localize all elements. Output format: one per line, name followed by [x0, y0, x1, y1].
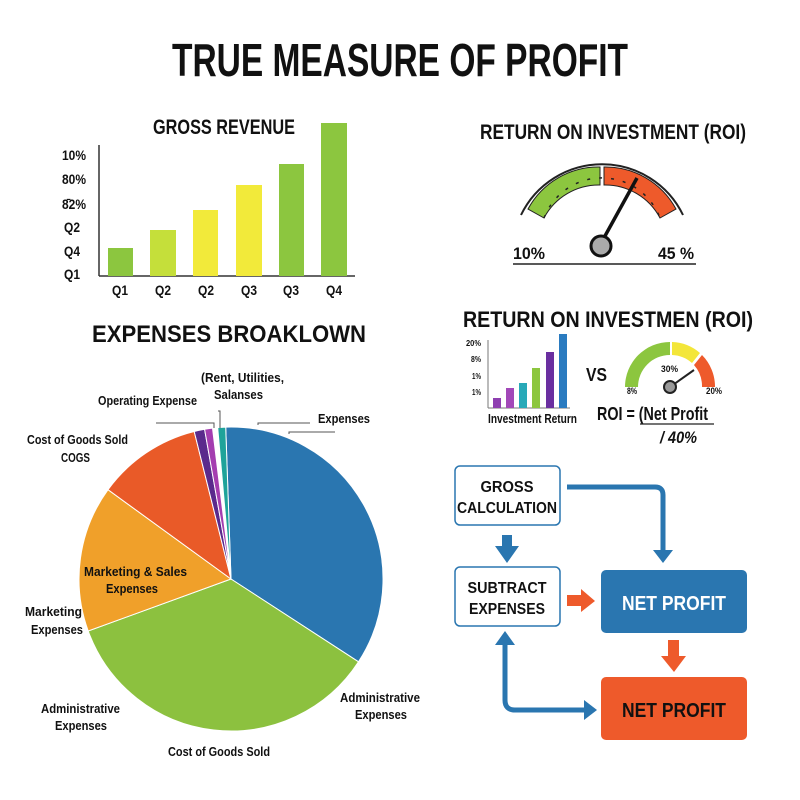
mini bar chart: 8%	[471, 355, 481, 364]
formula: / 40%	[659, 428, 697, 447]
panel: gross revenue bar chart: Q2	[155, 282, 171, 298]
pie chart	[79, 427, 383, 731]
panel: expenses pie: Cost of Goods Sold	[27, 432, 128, 447]
panel: flowchart	[455, 466, 747, 740]
panel: expenses pie: COGS	[61, 450, 90, 465]
box: gross calculation: CALCULATION	[457, 500, 557, 517]
panel: expenses pie: Expenses	[106, 581, 158, 596]
arrow: subtract to net profit	[567, 589, 595, 612]
panel: expenses pie: Expenses	[55, 718, 107, 733]
panel: gross revenue bar chart: 8̄2%	[62, 196, 86, 212]
panel: expenses pie: Expenses	[355, 707, 407, 722]
arrow: gross to subtract	[495, 535, 519, 563]
panel: expenses pie: Salanses	[214, 387, 263, 402]
panel: gross revenue bar chart: Q1	[112, 282, 128, 298]
panel: expenses pie: Expenses	[318, 411, 370, 426]
box: gross calculation: GROSS	[480, 479, 534, 496]
panel: expenses pie: Administrative	[41, 701, 120, 716]
panel: expenses pie: Expenses	[31, 622, 83, 637]
panel: expenses pie	[25, 321, 420, 759]
box: subtract expenses	[455, 567, 560, 626]
panel: gross revenue bar chart: Q2	[198, 282, 214, 298]
panel: gross revenue bar chart: Q1	[64, 266, 80, 282]
box: subtract expenses: SUBTRACT	[468, 580, 547, 597]
mini gauge: 8%	[627, 386, 637, 396]
heading: gross revenue: GROSS REVENUE	[153, 116, 295, 139]
mini bar chart	[466, 334, 577, 426]
box: gross calculation	[455, 466, 560, 525]
heading: ROI comparison: RETURN ON INVESTMEN (ROI)	[463, 307, 753, 332]
mini bar chart: Investment Return	[488, 411, 577, 426]
box: net profit blue	[601, 570, 747, 633]
arrow: gross to net profit	[567, 487, 663, 551]
panel: gross revenue bar chart: Q4	[326, 282, 342, 298]
panel: gross revenue bar chart	[62, 116, 355, 298]
arrow: net profit down	[661, 640, 686, 672]
panel: gross revenue bar chart: Q2	[64, 219, 80, 235]
box: net profit blue: NET PROFIT	[622, 593, 726, 615]
panel: gross revenue bar chart: 80%	[62, 171, 86, 187]
panel: gross revenue bar chart: 10%	[62, 147, 86, 163]
heading: ROI: RETURN ON INVESTMENT (ROI)	[480, 121, 746, 144]
mini bar chart: 20%	[466, 339, 481, 348]
panel: expenses pie: Marketing & Sales	[84, 564, 187, 579]
panel: ROI comparison: VS	[586, 365, 607, 385]
mini gauge	[625, 342, 722, 396]
panel: ROI gauge	[480, 121, 746, 264]
panel: expenses pie: Cost of Goods Sold	[168, 744, 270, 759]
mini bar chart: 1%	[472, 372, 481, 381]
mini gauge: 20%	[706, 386, 722, 396]
box: net profit orange: NET PROFIT	[622, 700, 726, 722]
title: TRUE MEASURE OF PROFIT	[172, 34, 628, 86]
panel: expenses pie: (Rent, Utilities,	[201, 370, 284, 385]
panel: expenses pie: Administrative	[340, 690, 420, 705]
panel: gross revenue bar chart: Q4	[64, 243, 80, 259]
arrow: loop back	[505, 643, 585, 710]
panel: expenses pie: Marketing	[25, 604, 82, 619]
box: net profit orange	[601, 677, 747, 740]
panel: gross revenue bar chart: Q3	[241, 282, 257, 298]
panel: ROI gauge: 10%	[513, 244, 545, 263]
formula	[597, 404, 714, 447]
mini bar chart: 1%	[472, 388, 481, 397]
panel: ROI gauge: 45 %	[658, 244, 694, 263]
formula: ROI = (Net Profit	[597, 404, 708, 424]
panel: expenses pie: Operating Expense	[98, 393, 197, 408]
mini gauge: 30%	[661, 364, 678, 374]
panel: ROI comparison	[463, 307, 753, 447]
heading: expenses breakdown: EXPENSES BROAKLOWN	[92, 321, 366, 348]
panel: gross revenue bar chart: Q3	[283, 282, 299, 298]
box: subtract expenses: EXPENSES	[469, 601, 545, 618]
